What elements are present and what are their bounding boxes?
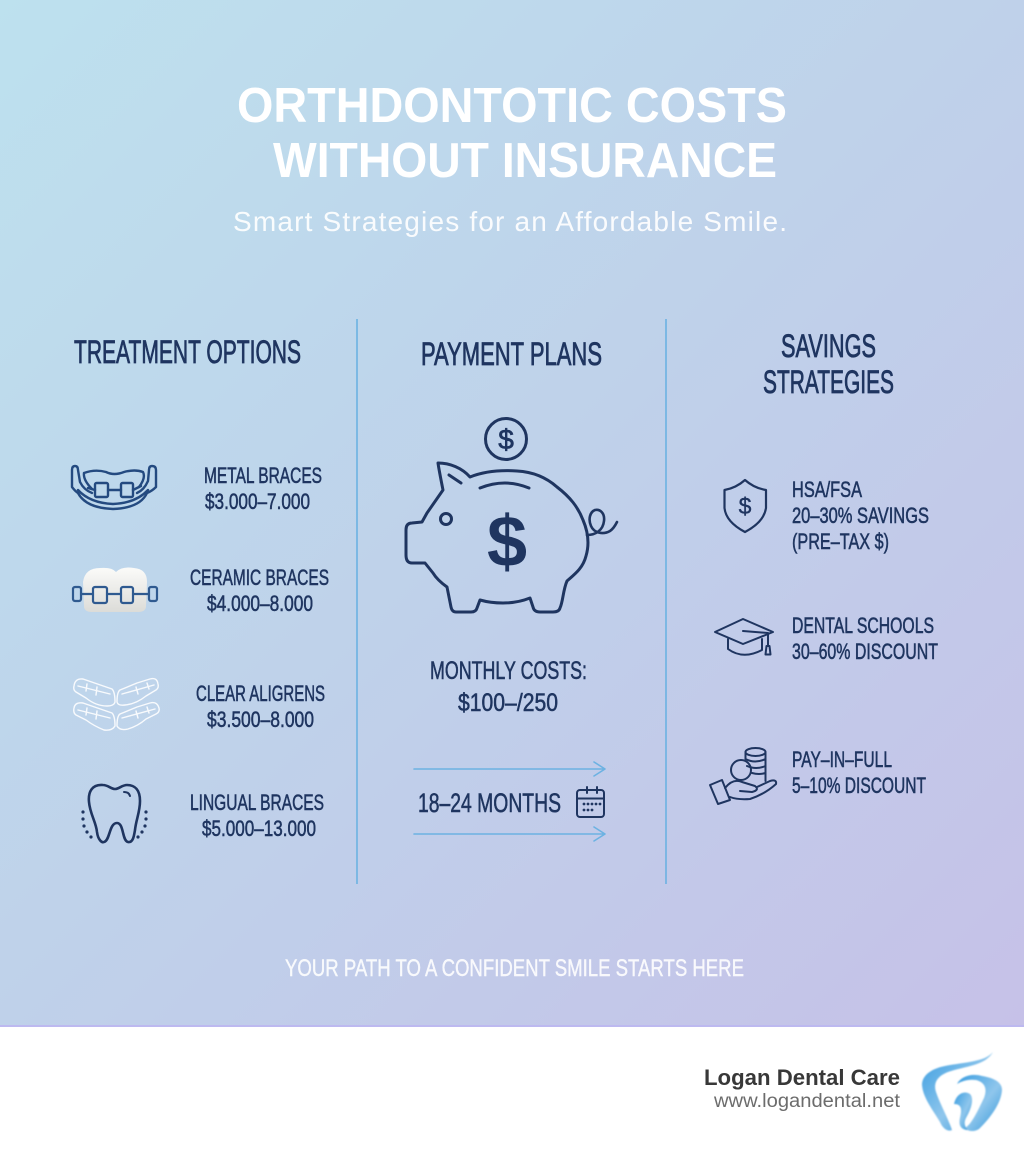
icon: ceramic braces: [73, 568, 157, 612]
item: metal braces: METAL BRACES: [204, 463, 322, 488]
icon: coin: $: [498, 424, 514, 455]
item: pay in full: [792, 747, 926, 798]
item: dental schools: [792, 613, 938, 664]
icon: shield: [724, 480, 766, 532]
item: hsa fsa: 20–30% SAVINGS: [792, 503, 929, 528]
icon: graduation cap: [715, 619, 773, 655]
icon: tooth: [81, 785, 148, 842]
item: dental schools: DENTAL SCHOOLS: [792, 613, 934, 638]
item: hsa fsa: [792, 477, 929, 554]
column dividers: [357, 319, 666, 884]
item: ceramic braces: $4.000–8.000: [207, 591, 313, 616]
icon: piggy bank: [406, 463, 617, 612]
panel: treatment options: [72, 334, 329, 842]
closing tagline: YOUR PATH TO A CONFIDENT SMILE STARTS HERE: [285, 955, 744, 982]
icon: hand with coins: [710, 748, 776, 804]
item: pay in full: 5–10% DISCOUNT: [792, 773, 926, 798]
icon: piggy bank: $: [487, 502, 527, 582]
item: dental schools: 30–60% DISCOUNT: [792, 639, 938, 664]
logo: tooth: [922, 1052, 1002, 1131]
item: metal braces: [204, 463, 322, 514]
item: pay in full: PAY–IN–FULL: [792, 747, 892, 772]
panel: payment plans: [406, 336, 617, 841]
heading: savings strategies: [763, 328, 894, 400]
monthly costs: [430, 657, 587, 717]
monthly costs: MONTHLY COSTS:: [430, 657, 587, 685]
item: ceramic braces: [190, 565, 329, 616]
title: [237, 79, 787, 188]
item: clear aligners: $3.500–8.000: [207, 707, 314, 732]
title: ORTHDONTOTIC COSTS: [237, 79, 787, 133]
heading: treatment options: TREATMENT OPTIONS: [74, 334, 301, 370]
heading: savings strategies: STRATEGIES: [763, 364, 894, 400]
item: lingual braces: [190, 790, 324, 841]
brand name and website: Logan Dental Care: [704, 1065, 900, 1090]
item: clear aligners: CLEAR ALIGRENS: [196, 681, 325, 706]
heading: savings strategies: SAVINGS: [781, 328, 876, 364]
heading: payment plans: PAYMENT PLANS: [421, 336, 602, 372]
subtitle: Smart Strategies for an Affordable Smile.: [233, 206, 787, 237]
duration label: 18–24 MONTHS: [418, 788, 561, 818]
item: hsa fsa: (PRE–TAX $): [792, 529, 889, 554]
brand name and website: www.logandental.net: [713, 1091, 901, 1112]
item: hsa fsa: HSA/FSA: [792, 477, 862, 502]
icon: calendar: [577, 787, 604, 817]
item: lingual braces: LINGUAL BRACES: [190, 790, 324, 815]
icon: metal braces: [72, 466, 156, 509]
item: ceramic braces: CERAMIC BRACES: [190, 565, 329, 590]
item: clear aligners: [196, 681, 325, 732]
arrow: top: [414, 762, 605, 776]
panel: savings strategies: [710, 328, 938, 804]
item: metal braces: $3.000–7.000: [205, 489, 310, 514]
arrow: bottom: [414, 827, 605, 841]
title: WITHOUT INSURANCE: [273, 134, 777, 188]
item: lingual braces: $5.000–13.000: [202, 816, 316, 841]
footer band: [0, 1027, 1024, 1154]
icon: clear aligners: [74, 679, 159, 730]
brand name and website: [704, 1065, 901, 1112]
monthly costs: $100–/250: [458, 689, 558, 717]
icon: coin: [486, 418, 526, 460]
icon: shield: $: [739, 493, 752, 519]
